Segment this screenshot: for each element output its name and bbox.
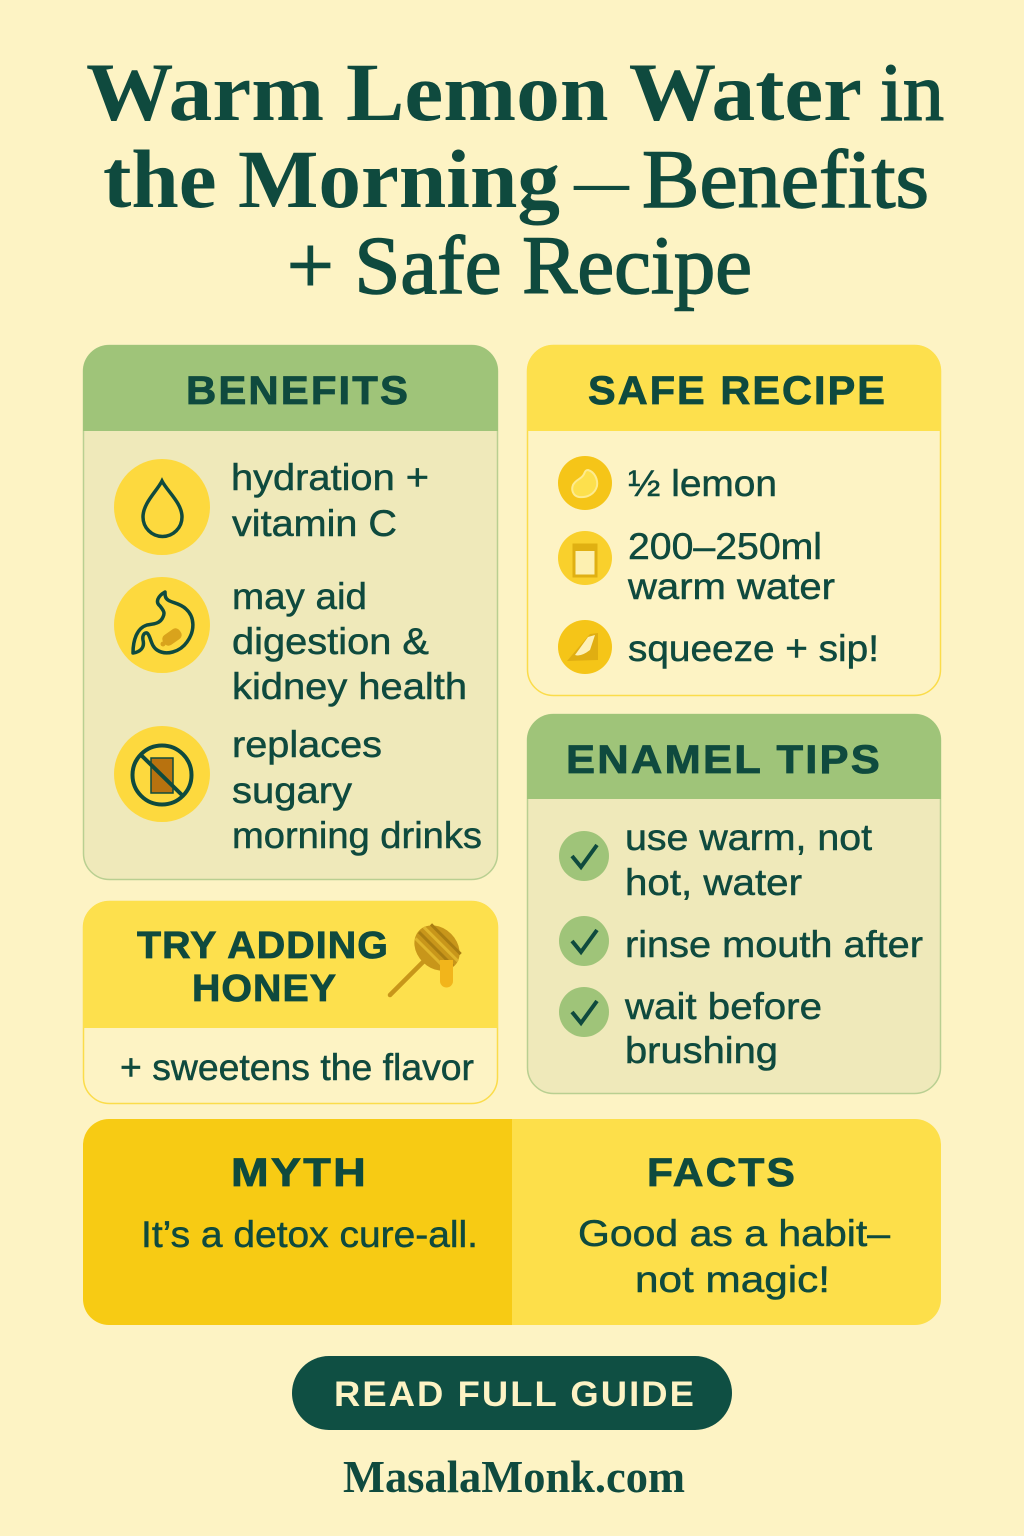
myth side: It’s a detox cure-all. [141,1214,478,1255]
tip text: brushing: wait before [624,986,822,1027]
recipe text: lemon: ½ lemon [628,463,777,504]
benefit text: hydration [231,457,429,544]
icon: check 2 [559,916,609,966]
icon: check 1 [559,831,609,881]
panel: enamel tips [527,714,941,1094]
title: — [573,133,630,225]
enamel tips header: ENAMEL TIPS [566,738,882,782]
facts side: Good as a habit– [578,1213,890,1254]
myth side [83,1119,512,1325]
facts side: not magic! [635,1259,830,1300]
safe recipe header [527,345,941,431]
facts side [512,1119,941,1325]
benefits header: BENEFITS [186,369,410,413]
icon: no sugary drink [114,726,210,822]
title: Benefits [642,133,929,225]
myth side: MYTH [231,1151,368,1195]
tip text: warm water: use warm, not [625,817,873,858]
button: read full guide: READ FULL GUIDE [334,1375,696,1414]
tip text: rinse: rinse mouth after [625,924,923,965]
panel: myth and facts [83,1119,941,1325]
recipe text: squeeze: squeeze + sip! [628,628,879,669]
benefits header [83,345,498,431]
honey text: + sweetens the flavor [120,1047,474,1088]
website: MasalaMonk.com [343,1451,685,1502]
icon: check 3 [559,987,609,1037]
icon: squeeze [558,620,612,674]
icon: honey dipper [390,916,469,995]
icon: glass [558,531,612,585]
recipe text: water: warm water [627,566,835,607]
title: in [880,46,944,138]
honey header [83,901,498,1028]
recipe text: water: 200–250ml [628,526,822,567]
title: Warm Lemon Water [86,46,862,138]
title [86,46,944,311]
benefit text: sugary drinks: morning drinks [232,815,482,856]
panel: try adding honey [83,901,498,1104]
benefit text: sugary drinks: replaces [232,724,382,765]
honey header: TRY ADDING [137,925,389,967]
button: read full guide [292,1356,732,1430]
benefit text: digestion [232,576,467,707]
benefit text: hydration: hydration + [231,457,429,498]
tip text: brushing: brushing [625,1030,778,1071]
icon: stomach [114,577,210,673]
tip text: brushing [624,986,822,1071]
icon: lemon [558,456,612,510]
benefit text: hydration: vitamin C [232,503,397,544]
enamel tips header [527,714,941,799]
honey header: HONEY [192,968,337,1010]
tip text: warm water: hot, water [625,862,802,903]
panel: safe recipe [527,345,941,696]
benefit text: digestion: may aid [232,576,367,617]
recipe text: water [627,526,835,607]
benefit text: sugary drinks [232,724,482,856]
title: + Safe Recipe [287,219,752,311]
benefit text: sugary drinks: sugary [232,770,353,811]
panel: benefits [83,345,498,880]
safe recipe header: SAFE RECIPE [588,369,887,413]
icon: water drop [114,459,210,555]
benefit text: digestion: kidney health [232,666,467,707]
benefit text: digestion: digestion & [232,621,429,662]
tip text: warm water [625,817,873,903]
title: the Morning [103,133,560,225]
facts side: FACTS [647,1151,797,1195]
